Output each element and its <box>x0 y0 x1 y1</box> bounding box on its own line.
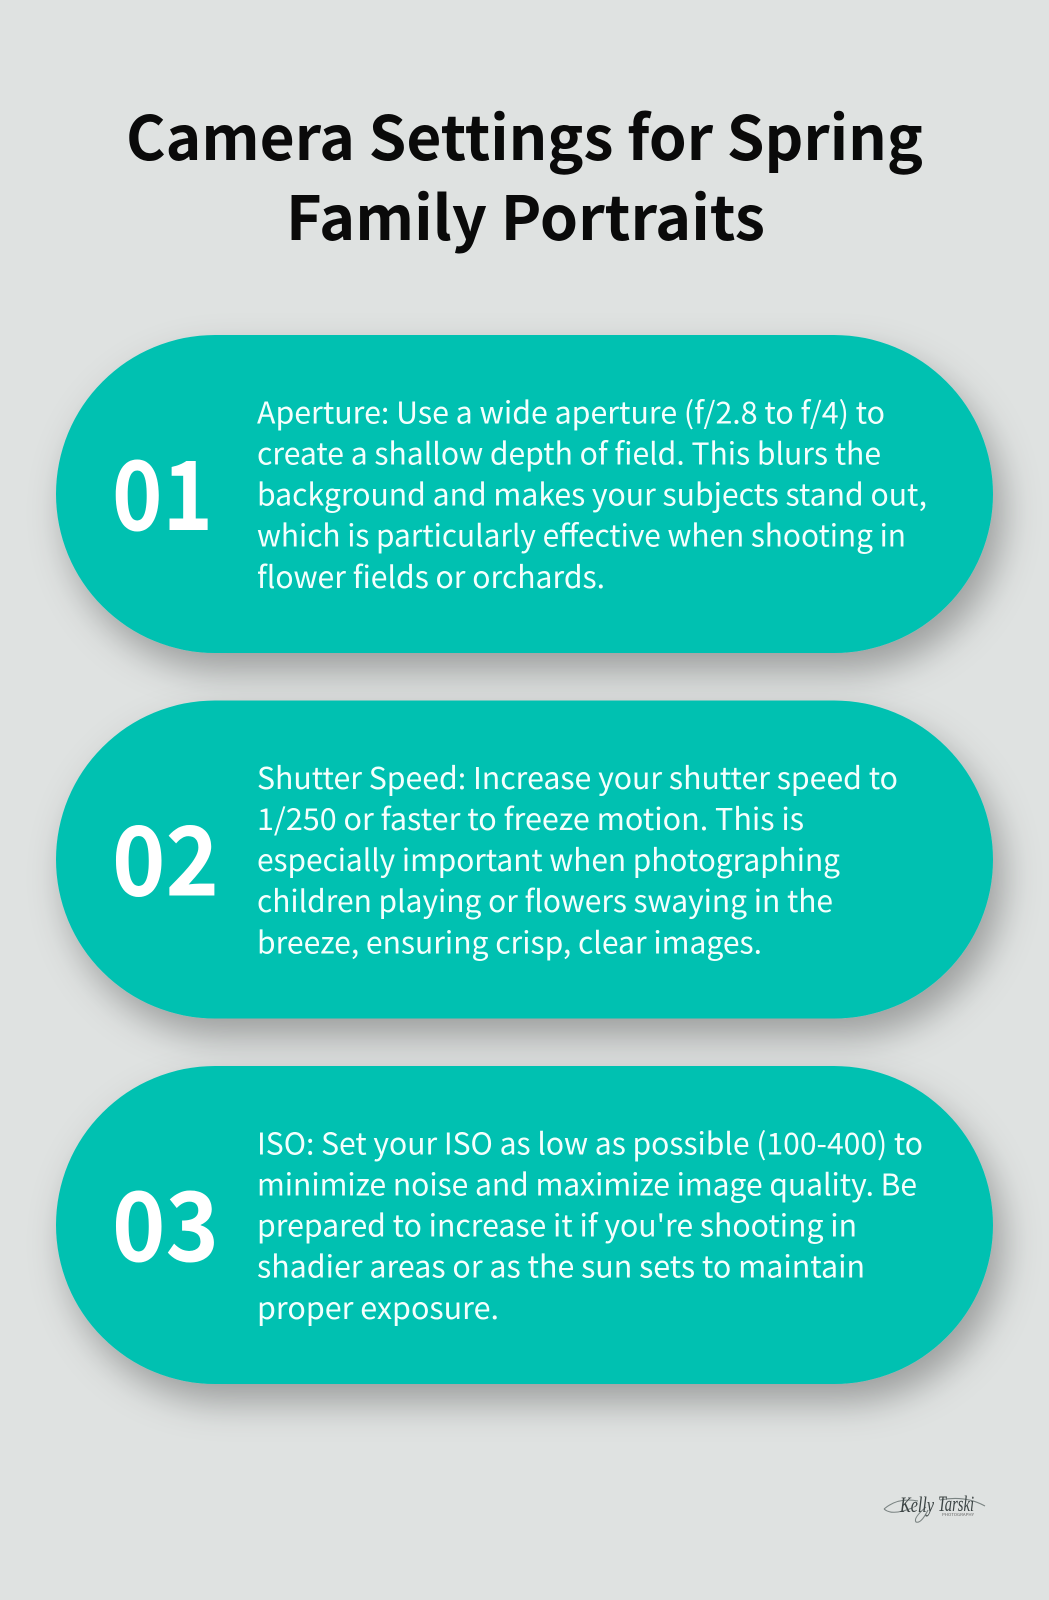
aperture text: background and makes your subjects stand out, <box>257 470 927 514</box>
logo signature: Kelly <box>899 1492 934 1517</box>
title: Camera Settings for Spring <box>126 89 923 178</box>
pill background <box>56 700 993 1018</box>
aperture text: Aperture: Use a wide aperture (f/2.8 to f/4) to <box>257 388 885 432</box>
shutter speed text: breeze, ensuring crisp, clear images. <box>257 918 762 962</box>
shutter speed text: especially important when photographing <box>257 836 840 880</box>
logo signature: PHOTOGRAPHY <box>942 1513 974 1518</box>
title: Family Portraits <box>286 169 765 258</box>
aperture text: create a shallow depth of field. This blurs the <box>257 430 881 474</box>
logo signature <box>884 1491 985 1522</box>
number 03: 03 <box>112 1150 219 1289</box>
number 01: 01 <box>112 419 213 558</box>
panel: shutter speed <box>56 700 993 1018</box>
shutter speed text <box>257 754 898 962</box>
shutter speed text: 1/250 or faster to freeze motion. This is <box>257 795 804 839</box>
panel: aperture <box>56 335 993 653</box>
aperture text: which is particularly effective when shooting in <box>257 512 906 556</box>
logo signature: Tarski <box>938 1491 974 1516</box>
title <box>126 89 923 258</box>
number 02: 02 <box>112 784 219 924</box>
ISO text: ISO: Set your ISO as low as possible (100-400) to <box>257 1120 923 1164</box>
pill background <box>56 335 993 653</box>
shutter speed text: children playing or flowers swaying in the <box>257 877 833 921</box>
ISO text: minimize noise and maximize image quality. Be <box>257 1160 917 1204</box>
pill background <box>56 1066 993 1384</box>
shutter speed text: Shutter Speed: Increase your shutter speed to <box>257 754 898 798</box>
ISO text: proper exposure. <box>257 1284 499 1328</box>
ISO text: shadier areas or as the sun sets to maintain <box>257 1242 865 1286</box>
aperture text <box>257 388 927 597</box>
ISO text: prepared to increase it if you're shooting in <box>257 1202 857 1246</box>
aperture text: flower fields or orchards. <box>257 553 605 597</box>
ISO text <box>257 1120 923 1328</box>
panel: ISO <box>56 1066 993 1384</box>
